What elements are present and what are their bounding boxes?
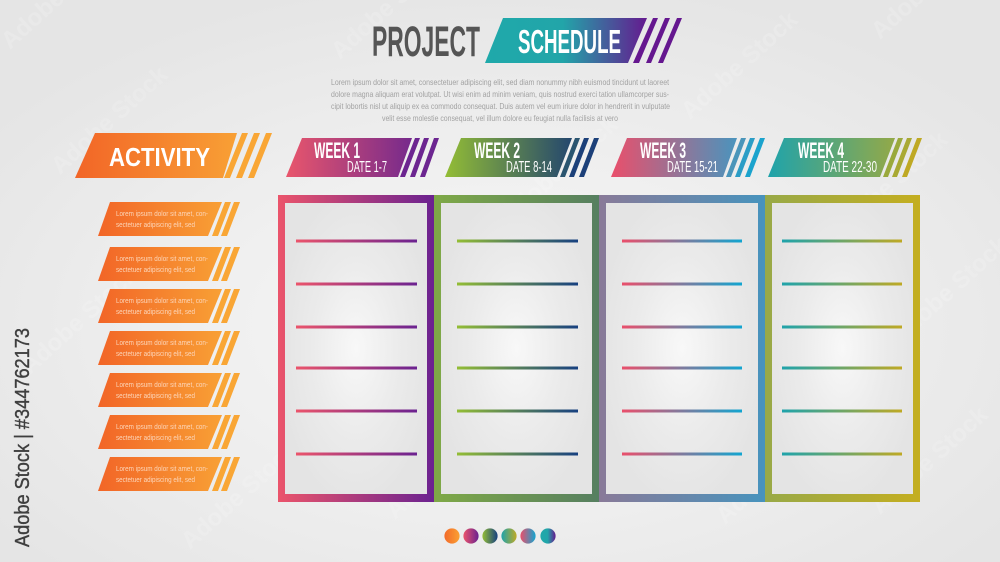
activity row 3	[98, 289, 240, 323]
intro paragraph: dolore magna aliquam erat volutpat. Ut wisi enim ad minim veniam, quis nostrud exerci tation ullamcorper sus-	[331, 89, 669, 99]
activity row 1	[98, 202, 240, 236]
watermark: Adobe Stock	[676, 6, 804, 124]
panel: week 4 column	[765, 195, 920, 502]
watermark: Adobe Stock	[541, 246, 669, 364]
week 3 header: DATE 15-21	[667, 159, 718, 176]
activity row 2	[98, 247, 240, 281]
week 1 header	[286, 138, 439, 177]
watermark: Adobe Stock	[496, 111, 624, 229]
watermark: Adobe Stock	[16, 261, 144, 379]
panel: week 2 column	[434, 195, 599, 502]
stock id label: Adobe Stock | #344762173	[12, 328, 34, 547]
activity row 1: sectetuer adipiscing elit, sed	[116, 220, 195, 229]
watermark: Adobe Stock	[866, 401, 994, 519]
activity stripes	[224, 133, 272, 178]
week 3 header	[611, 138, 765, 177]
activity row 3: Lorem ipsum dolor sit amet, con-	[116, 296, 208, 305]
week 1 header: DATE 1-7	[347, 159, 387, 176]
activity row 4: sectetuer adipiscing elit, sed	[116, 349, 195, 358]
banner: schedule	[485, 18, 647, 63]
watermark: Adobe Stock	[381, 406, 509, 524]
activity row 4: Lorem ipsum dolor sit amet, con-	[116, 338, 208, 347]
activity row 6: sectetuer adipiscing elit, sed	[116, 433, 195, 442]
activity row 1: Lorem ipsum dolor sit amet, con-	[116, 209, 208, 218]
activity row 6	[98, 415, 240, 449]
week 2 header: DATE 8-14	[506, 159, 552, 176]
activity row 2: sectetuer adipiscing elit, sed	[116, 265, 195, 274]
activity row 5: sectetuer adipiscing elit, sed	[116, 391, 195, 400]
activity banner	[75, 133, 237, 178]
activity rows	[98, 202, 240, 491]
intro paragraph	[331, 77, 670, 123]
week 3 header: WEEK 3	[640, 138, 686, 163]
panel: week 1 column	[278, 195, 434, 502]
title	[372, 18, 682, 66]
watermark: Adobe Stock	[711, 411, 839, 529]
intro paragraph: Lorem ipsum dolor sit amet, consectetuer adipiscing elit, sed diam nonummy nibh euismod tincidunt ut laoreet	[331, 77, 670, 87]
activity row 4	[98, 331, 240, 365]
activity row 7: Lorem ipsum dolor sit amet, con-	[116, 464, 208, 473]
week 1 header: WEEK 1	[314, 138, 360, 163]
week 4 header: DATE 22-30	[823, 159, 877, 176]
activity row 6: Lorem ipsum dolor sit amet, con-	[116, 422, 208, 431]
week 4 header	[768, 138, 922, 177]
week 2 header	[445, 138, 599, 177]
week 4 header: WEEK 4	[798, 138, 844, 163]
intro paragraph: cipit lobortis nisl ut aliquip ex ea commodo consequat. Duis autem vel eum iriure dolor in hendrerit in vulputate	[331, 101, 670, 111]
activity row 7	[98, 457, 240, 491]
week 2 header: WEEK 2	[474, 138, 520, 163]
activity label: ACTIVITY	[109, 142, 210, 172]
heading: project: PROJECT	[372, 18, 480, 66]
watermark: Adobe Stock	[176, 436, 304, 554]
activity row 7: sectetuer adipiscing elit, sed	[116, 475, 195, 484]
activity row 3: sectetuer adipiscing elit, sed	[116, 307, 195, 316]
intro paragraph: velit esse molestie consequat, vel illum dolore eu feugiat nulla facilisis at vero	[382, 113, 618, 123]
heading: schedule: SCHEDULE	[518, 23, 621, 60]
activity row 5: Lorem ipsum dolor sit amet, con-	[116, 380, 208, 389]
activity header	[75, 133, 272, 178]
activity row 5	[98, 373, 240, 407]
activity row 2: Lorem ipsum dolor sit amet, con-	[116, 254, 208, 263]
panel: week 3 column	[599, 195, 765, 502]
watermark: Adobe Stock	[826, 126, 954, 244]
colour dots	[444, 528, 556, 544]
watermark: Adobe Stock	[271, 216, 399, 334]
watermark: Adobe Stock	[46, 61, 174, 179]
banner stripes	[633, 18, 682, 63]
